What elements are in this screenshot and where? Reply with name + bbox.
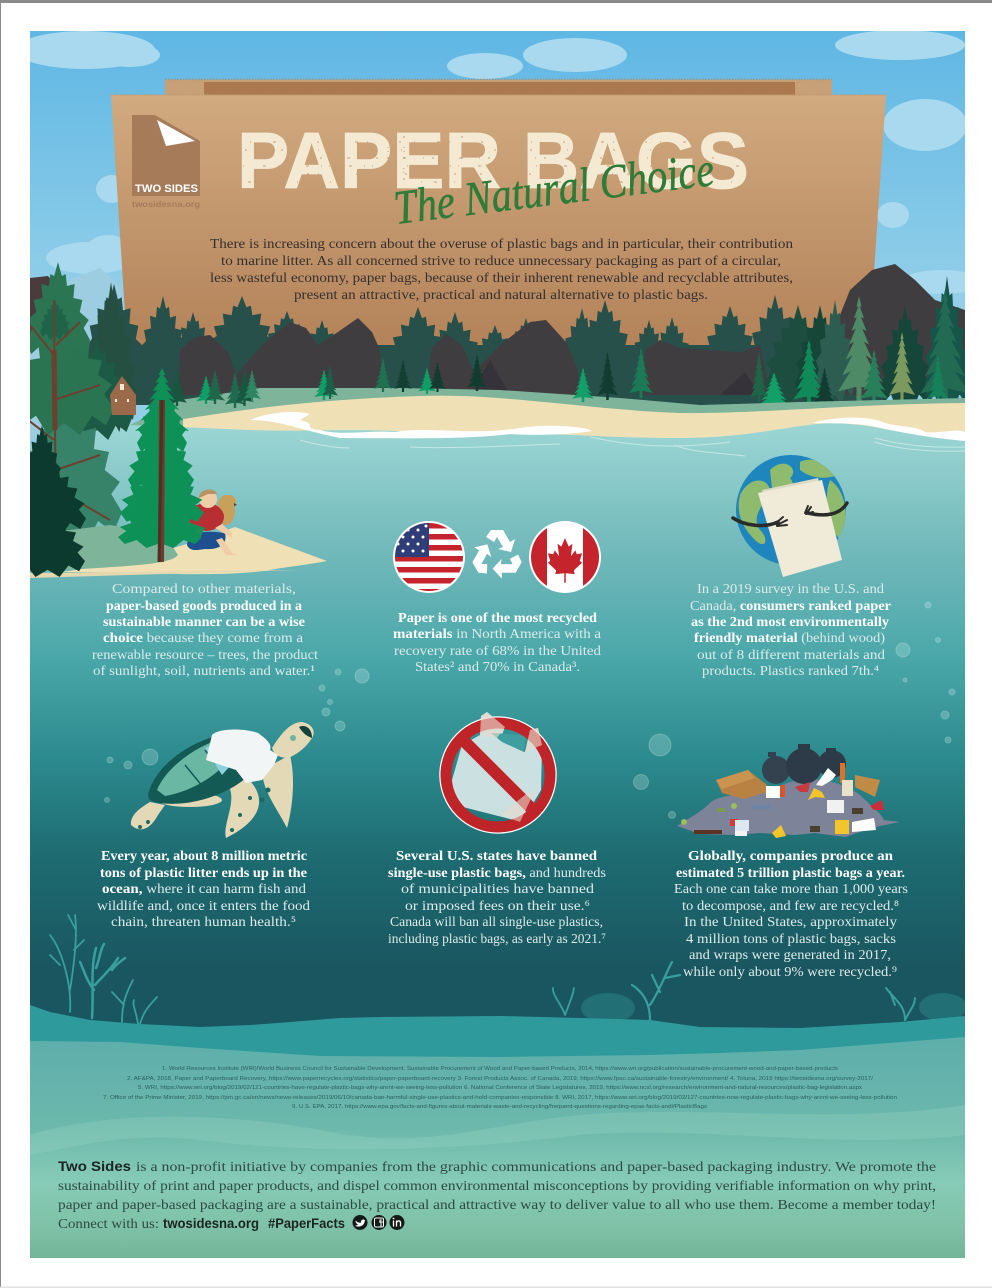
intro text: present an attractive, practical and natural alternative to plastic bags.	[294, 288, 708, 303]
right forest	[750, 276, 965, 404]
about Two Sides text: #PaperFacts	[268, 1216, 345, 1231]
text: plastic bag bans: Several U.S. states have banned	[396, 849, 597, 864]
text: paper-based goods	[92, 582, 318, 679]
text: consumer survey	[690, 582, 891, 679]
about Two Sides text: twosidesna.org	[163, 1216, 259, 1231]
cabin	[110, 376, 136, 415]
text: consumer survey: as the 2nd most environmentally	[691, 615, 889, 630]
text: paper-based goods: choice because they come from a	[103, 631, 304, 646]
intro text: There is increasing concern about the overuse of plastic bags and in particular, their contribution	[210, 237, 793, 252]
text: consumer survey: products. Plastics ranked 7th.⁴	[702, 664, 879, 679]
icon: no plastic bags sign	[440, 712, 556, 833]
text: most recycled materials: Paper is one of the most recycled	[398, 611, 597, 626]
footnotes: 5. WRI, https://www.wri.org/blog/2019/02/121-countries-have-regulate-plastic-bags-why-arent-we-seeing-less-pollution 6. National Conference of State Legislatures, 2019, https://www.ncsl.org/research/environment-and-natural-resources/plastic-bag-legislation.aspx	[138, 1085, 863, 1091]
social media icons	[352, 1215, 404, 1230]
text: most recycled materials: materials in North America with a	[393, 627, 602, 642]
paper bag	[111, 80, 886, 360]
icon: sea turtle with plastic bag	[131, 722, 314, 838]
bright foreground tree	[118, 368, 204, 562]
sky with clouds	[15, 30, 982, 461]
text: global plastic bag production: estimated 5 trillion plastic bags a year.	[676, 866, 905, 881]
text: global plastic bag production: while only about 9% were recycled.⁹	[683, 965, 897, 980]
text: plastic litter in ocean: tons of plastic litter ends up in the	[100, 866, 307, 881]
icon: garbage pile	[677, 744, 900, 838]
text: plastic bag bans: of municipalities have banned	[401, 882, 594, 897]
text: most recycled materials: recovery rate of 68% in the United	[394, 644, 601, 659]
text: plastic litter in ocean: wildlife and, once it enters the food	[97, 899, 310, 914]
text: consumer survey: out of 8 different materials and	[697, 648, 885, 663]
logo: Two Sides: TWO SIDES	[135, 183, 198, 195]
text: plastic bag bans: including plastic bags, as early as 2021.⁷	[388, 932, 606, 947]
intro text: less wasteful economy, paper bags, because of their inherent renewable and recyclable attributes,	[210, 271, 793, 286]
text: consumer survey: In a 2019 survey in the U.S. and	[697, 582, 884, 597]
icon: earth hugging paper	[733, 455, 847, 577]
text: consumer survey: friendly material (behind wood)	[694, 631, 885, 646]
icon: US flag	[393, 521, 465, 594]
intro text: to marine litter. As all concerned strive to reduce unnecessary packaging as part of a circular,	[221, 254, 781, 269]
text: paper-based goods: renewable resource – trees, the product	[92, 648, 318, 663]
icon: recycling arrows	[466, 530, 524, 583]
wave foam	[250, 412, 965, 441]
text: consumer survey: Canada, consumers ranked paper	[690, 599, 891, 614]
text: paper-based goods: sustainable manner can be a wise	[103, 615, 305, 630]
footnotes: 2. AF&PA, 2018, Paper and Paperboard Recovery, https://www.paperrecycles.org/statistics/paper-paperboard-recovery 3. Forest Products Assoc. of Canada, 2019, https://www.fpac.ca/sustainable-forestry/environment/ 4. Toluna, 2019 https://twosidesna.org/survey-2017/	[127, 1076, 874, 1082]
about Two Sides text: Two Sides	[58, 1159, 131, 1174]
text: most recycled materials: States² and 70% in Canada³.	[415, 660, 580, 675]
about Two Sides text	[58, 1159, 936, 1232]
icon: Canada flag	[529, 521, 601, 593]
left island	[30, 525, 327, 578]
text: global plastic bag production: In the United States, approximately	[684, 915, 897, 930]
ground and beach	[130, 388, 965, 438]
mountains	[30, 264, 965, 395]
text: plastic bag bans: Canada will ban all single-use plastics,	[390, 915, 603, 930]
water	[30, 412, 965, 1040]
footnotes: 9. U.S. EPA, 2017, https://www.epa.gov/facts-and-figures-about-materials-waste-and-recycling/frequent-questions-regarding-epas-facts-and#PlasticBags	[292, 1104, 708, 1110]
sea floor	[30, 1005, 965, 1258]
footnotes: 1. World Resources Institute (WRI)/World Business Council for Sustainable Development, Sustainable Procurement of Wood and Paper-based Products, 2014, https://www.wri.org/publication/sustainable-procurement-wood-and-paper-based-products	[162, 1066, 839, 1072]
text: global plastic bag production: to decompose, and few are recycled.⁸	[682, 899, 899, 914]
subtitle: The Natural Choice: The Natural Choice	[391, 143, 717, 235]
text: global plastic bag production	[674, 849, 908, 980]
text: paper-based goods: of sunlight, soil, nutrients and water.¹	[93, 664, 315, 679]
foreground left trees	[30, 262, 137, 530]
person and dog on island	[187, 489, 240, 555]
text: plastic litter in ocean: ocean, where it can harm fish and	[102, 882, 306, 897]
small shoreline trees	[167, 348, 653, 408]
about Two Sides text: sustainability of print and paper products, and dispel common environmental misconceptions by providing verifiable information on why print,	[58, 1179, 936, 1194]
text: plastic litter in ocean: Every year, about 8 million metric	[101, 849, 307, 864]
text: plastic litter in ocean	[97, 849, 310, 930]
text: plastic litter in ocean: chain, threaten human health.⁵	[111, 915, 296, 930]
text: plastic bag bans: or imposed fees on their use.⁶	[405, 899, 590, 914]
about Two Sides text: is a non-profit initiative by companies from the graphic communications and paper-based packaging industry. We promote the	[136, 1160, 936, 1175]
text: paper-based goods: Compared to other materials,	[112, 582, 296, 597]
distant tree line	[82, 284, 885, 405]
footnotes: 7. Office of the Prime Minister, 2019, https://pm.gc.ca/en/news/news-releases/2019/06/10/canada-ban-harmful-single-use-plastics-and-hold-companies-responsible 8. WRI, 2017, https://www.wri.org/blog/2019/02/127-countries-now-regulate-plastic-bags-why-arent-we-seeing-less-pollution	[103, 1095, 897, 1101]
text: global plastic bag production: 4 million tons of plastic bags, sacks	[686, 932, 896, 947]
intro text	[210, 237, 793, 303]
text: paper-based goods: paper-based goods produced in a	[106, 599, 302, 614]
bubbles	[104, 602, 955, 818]
text: global plastic bag production: Each one can take more than 1,000 years	[674, 882, 908, 897]
text: global plastic bag production: and wraps were generated in 2017,	[689, 948, 891, 963]
text: most recycled materials	[393, 611, 602, 675]
logo: Two Sides	[132, 115, 200, 209]
logo: Two Sides: twosidesna.org	[132, 199, 200, 209]
seaweed and coral	[50, 915, 915, 1024]
title: PAPER BAGS: PAPER BAGS	[237, 116, 749, 205]
text: global plastic bag production: Globally, companies produce an	[688, 849, 893, 864]
dark foreground tree	[30, 425, 86, 577]
text: plastic bag bans: single-use plastic bags, and hundreds	[388, 866, 606, 881]
about Two Sides text: Connect with us:	[58, 1217, 159, 1232]
text: plastic bag bans	[388, 849, 606, 947]
footnotes	[103, 1066, 897, 1110]
about Two Sides text: paper and paper-based packaging are a sustainable, practical and attractive way to deliver value to all who use them. Become a member today!	[58, 1198, 936, 1213]
